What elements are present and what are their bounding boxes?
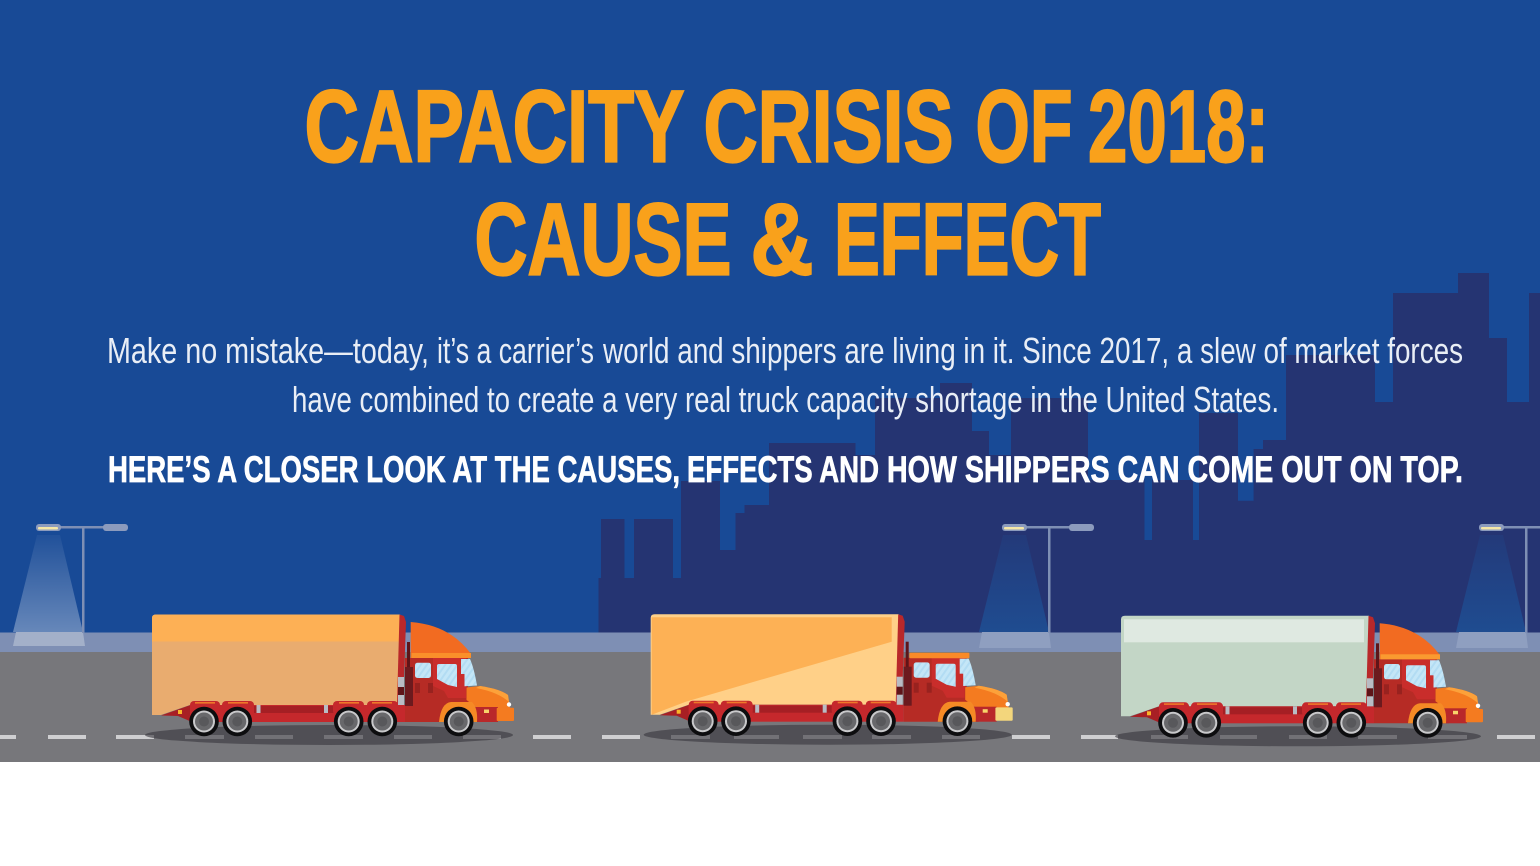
sidewalk strip bbox=[0, 632, 1540, 652]
truck 3: pale green trailer bbox=[1115, 616, 1483, 746]
title line 1 bbox=[304, 70, 1269, 184]
subheading: HERE’S A CLOSER LOOK AT THE CAUSES, bbox=[108, 449, 680, 490]
title line 2: CAUSE bbox=[474, 182, 732, 296]
title line 2: & bbox=[750, 182, 814, 296]
title line 1: OF bbox=[976, 70, 1072, 184]
truck 1: orange trailer bbox=[145, 614, 514, 745]
city skyline silhouette bbox=[598, 273, 1540, 633]
title line 1: CAPACITY bbox=[304, 70, 684, 184]
road bbox=[0, 652, 1540, 762]
intro paragraph line 1: Make no mistake—today, bbox=[107, 330, 429, 371]
street lamp middle bbox=[979, 524, 1094, 648]
title line 1: CRISIS bbox=[704, 70, 954, 184]
title line 2 bbox=[474, 182, 1101, 296]
road lane dashes bbox=[0, 735, 1535, 739]
intro paragraph line 1: it’s a carrier’s bbox=[437, 330, 594, 371]
subheading: EFFECTS AND bbox=[687, 449, 879, 490]
street lamp right bbox=[1456, 524, 1540, 648]
truck 2: yellow trailer bbox=[644, 614, 1013, 745]
subheading bbox=[108, 449, 1463, 490]
title line 2: EFFECT bbox=[834, 182, 1101, 296]
title line 1: 2018: bbox=[1088, 70, 1269, 184]
intro paragraph line 1 bbox=[107, 330, 1463, 371]
street lamp left bbox=[13, 524, 128, 646]
